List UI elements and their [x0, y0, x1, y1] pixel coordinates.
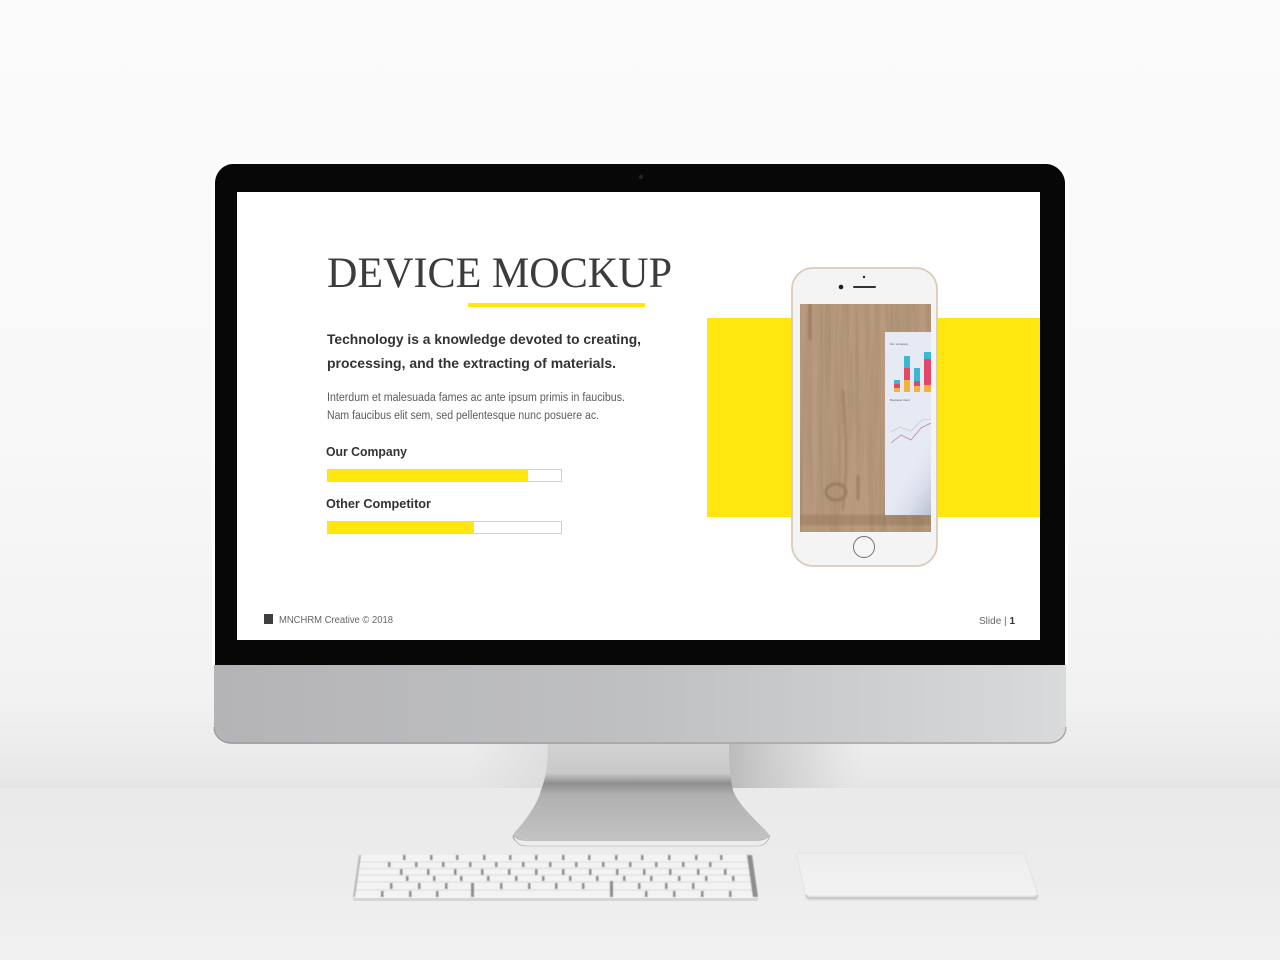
slide number: Slide | 1 [979, 616, 1015, 627]
phone screen photo [800, 304, 931, 532]
title underline [468, 303, 645, 307]
shadow on wall behind stand [470, 744, 864, 788]
stand foot front edge [513, 835, 770, 846]
keyboard [353, 855, 758, 901]
body paragraph: Nam faucibus elit sem, sed pellentesque nunc posuere ac. [327, 410, 599, 422]
progress: Our Company [326, 444, 562, 482]
body paragraph [327, 392, 625, 422]
stacked bars [894, 352, 931, 392]
trackpad shadow [806, 897, 1037, 900]
scene: desktop computer mockup [0, 161, 1280, 901]
lead paragraph: processing, and the extracting of materials. [327, 355, 616, 371]
line chart [891, 419, 931, 443]
lead paragraph: Technology is a knowledge devoted to creating, [327, 331, 641, 347]
phone sensor [863, 276, 865, 278]
webcam [639, 175, 643, 179]
desk surface [0, 788, 1280, 960]
progress: Our Company: Our Company [326, 444, 408, 459]
trackpad [797, 853, 1038, 900]
trackpad surface [797, 853, 1037, 896]
report paper [885, 332, 931, 515]
keyboard base edge [353, 897, 758, 901]
slide title: DEVICE MOCKUP [327, 250, 672, 297]
report heading: Our company [890, 342, 909, 346]
monitor stand [513, 744, 770, 846]
keyboard body [353, 855, 758, 898]
trackpad edge [806, 895, 1038, 898]
monitor outer highlight [212, 161, 1068, 665]
slide screen [237, 192, 1040, 640]
phone [792, 268, 937, 566]
stand body [513, 744, 769, 842]
phone earpiece [853, 286, 876, 288]
report subheading: Business trend [890, 398, 910, 402]
phone camera [839, 285, 843, 289]
footer credit: MNCHRM Creative © 2018 [279, 615, 393, 626]
phone body [792, 268, 937, 566]
monitor [212, 161, 1068, 744]
progress: Other Competitor [326, 496, 562, 534]
lead paragraph [327, 331, 641, 371]
yellow band [707, 318, 1040, 517]
body paragraph: Interdum et malesuada fames ac ante ipsum primis in faucibus. [327, 392, 625, 404]
footer marker [264, 614, 273, 624]
chin bottom edge [214, 727, 1066, 743]
monitor bezel [215, 164, 1065, 665]
progress: Other Competitor: Other Competitor [326, 496, 431, 511]
key rows and gaps [353, 855, 758, 897]
phone home button [854, 536, 874, 558]
monitor chin [214, 665, 1066, 744]
